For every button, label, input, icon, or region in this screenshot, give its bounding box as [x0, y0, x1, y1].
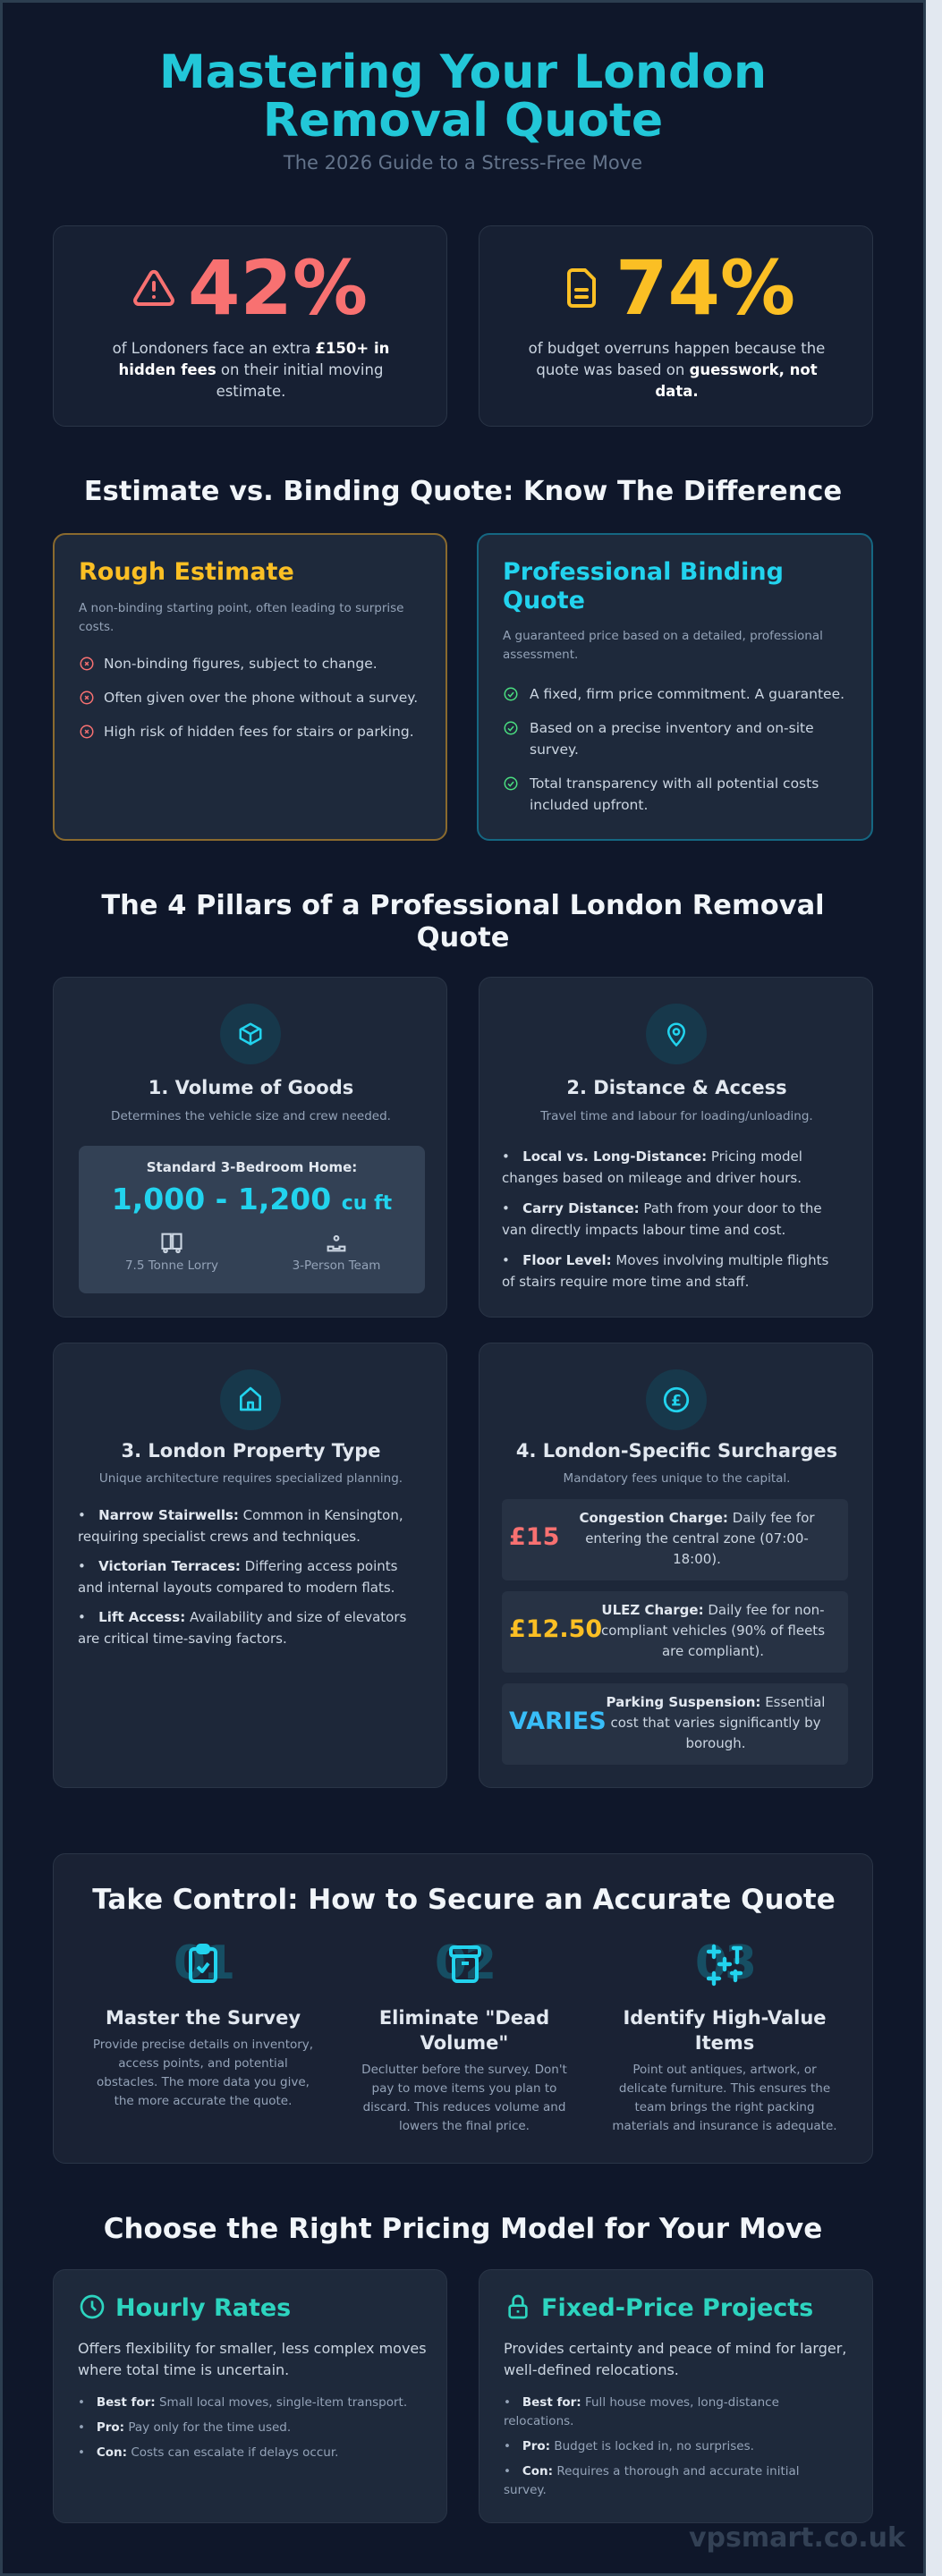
- list: [78, 2395, 407, 2460]
- description: A guaranteed price based on a detailed, professional assessment.: [503, 629, 823, 662]
- panel: rough estimate: [53, 533, 447, 841]
- icon: lorry: 7.5 Tonne Lorry: [125, 1258, 218, 1273]
- title: Mastering Your London: [159, 46, 767, 99]
- title: 2. Distance & Access: [566, 1077, 787, 1098]
- list: • Con: Requires a thorough and accurate initial survey.: [504, 2464, 800, 2497]
- fee: ULEZ: ULEZ Charge: Daily fee for non-compliant vehicles (90% of fleets are compliant).: [601, 1602, 825, 1659]
- list: Non-binding figures, subject to change.: [104, 656, 378, 672]
- subtitle: Determines the vehicle size and crew needed.: [111, 1109, 391, 1123]
- step 3: Identify High-Value: [623, 2007, 827, 2029]
- heading: Rough Estimate: [79, 558, 294, 586]
- list: • Lift Access: Availability and size of elevators are critical time-saving factors.: [78, 1609, 406, 1647]
- heading: 4 pillars: [101, 890, 825, 953]
- icon: pound coin: [646, 1369, 707, 1430]
- heading: estimate vs binding: Estimate vs. Binding Quote: Know The Difference: [84, 476, 842, 507]
- list: [78, 1507, 406, 1647]
- list: • Best for: Small local moves, single-item transport.: [78, 2395, 407, 2410]
- list: • Con: Costs can escalate if delays occur.: [78, 2445, 338, 2460]
- stat text: of Londoners face an extra £150+ in hidden fees on their initial moving estimate.: [113, 340, 389, 400]
- title: 1. Volume of Goods: [149, 1077, 353, 1098]
- panel: professional binding quote: [477, 533, 873, 841]
- subtitle: The 2026 Guide to a Stress-Free Move: [284, 152, 642, 174]
- fee: parking: VARIES: [509, 1707, 607, 1735]
- callout: 3-bedroom: [79, 1146, 425, 1293]
- step 1: Provide precise details on inventory, access points, and potential obstacles. The more data you give, the more accurate the quote.: [93, 2038, 313, 2108]
- fee: ULEZ: £12.50: [509, 1615, 602, 1643]
- panel: property type: [53, 1343, 447, 1788]
- step 2: Volume": [420, 2032, 508, 2054]
- panel: distance & access: [479, 977, 873, 1318]
- list: High risk of hidden fees for stairs or parking.: [104, 724, 414, 740]
- title: [159, 46, 767, 148]
- subtitle: Unique architecture requires specialized planning.: [99, 1471, 403, 1486]
- title: 4. London-Specific Surcharges: [516, 1440, 837, 1462]
- list: A fixed, firm price commitment. A guarantee.: [530, 686, 844, 702]
- step 2: Declutter before the survey. Don't pay to move items you plan to discard. This reduces volume and lowers the final price.: [361, 2063, 567, 2133]
- stat card: 74%: [479, 225, 873, 427]
- fee: congestion: £15: [509, 1523, 559, 1551]
- heading with clock icon: Hourly Rates: [115, 2294, 291, 2322]
- fee: congestion: [502, 1499, 848, 1580]
- list: • Pro: Pay only for the time used.: [78, 2420, 291, 2435]
- subtitle: Travel time and labour for loading/unloading.: [540, 1109, 813, 1123]
- list: Often given over the phone without a survey.: [104, 690, 418, 706]
- heading: Professional Binding Quote: [503, 558, 784, 614]
- icon: box: [220, 1004, 281, 1064]
- list: [81, 656, 418, 740]
- description: A non-binding starting point, often leading to surprise costs.: [79, 601, 404, 634]
- icon: clipboard with number: 01: [174, 1936, 233, 1990]
- panel: fixed-price projects: [479, 2269, 873, 2523]
- stat number: 74%: [615, 244, 795, 332]
- list: • Victorian Terraces: Differing access points and internal layouts compared to modern flats.: [78, 1558, 397, 1596]
- icon: pound coin: £: [671, 1392, 682, 1410]
- step 3: [612, 1936, 837, 2133]
- heading: pricing model: Choose the Right Pricing Model for Your Move: [104, 2213, 822, 2245]
- heading with lock icon: Fixed-Price Projects: [541, 2294, 813, 2322]
- step 2: [361, 1936, 567, 2133]
- list: • Local vs. Long-Distance: Pricing model changes based on mileage and driver hours.: [502, 1148, 802, 1186]
- icon: warning triangle: [133, 270, 174, 306]
- step 3: Point out antiques, artwork, or delicate furniture. This ensures the team brings the right packing materials and insurance is adequate.: [612, 2063, 837, 2133]
- panel: take control: [53, 1853, 873, 2164]
- icon: house: [220, 1369, 281, 1430]
- panel: hourly rates: [53, 2269, 447, 2523]
- description: Offers flexibility for smaller, less complex moves where total time is uncertain.: [78, 2340, 427, 2378]
- heading: 4 pillars: The 4 Pillars of a Professional London Removal: [101, 890, 825, 921]
- step 1: [93, 1936, 313, 2108]
- callout: 3-bedroom: Standard 3-Bedroom Home:: [147, 1159, 357, 1175]
- fee: ULEZ: [502, 1591, 848, 1673]
- description: Provides certainty and peace of mind for larger, well-defined relocations.: [504, 2340, 846, 2378]
- fee: parking: Parking Suspension: Essential cost that varies significantly by borough.: [607, 1694, 825, 1751]
- subtitle: Mandatory fees unique to the capital.: [564, 1471, 790, 1486]
- list: • Narrow Stairwells: Common in Kensington, requiring specialist crews and techniques.: [78, 1507, 403, 1545]
- list: [505, 686, 844, 813]
- stat text: of budget overruns happen because the quote was based on guesswork, not data.: [529, 340, 825, 400]
- list: [504, 2395, 800, 2497]
- panel: surcharges: [479, 1343, 873, 1788]
- icon: team: [293, 1235, 380, 1273]
- icon: document: [567, 268, 596, 308]
- icon: sparkles with number: 03: [695, 1936, 754, 1990]
- icon: lorry: [125, 1233, 218, 1273]
- heading: 4 pillars: Quote: [417, 922, 509, 953]
- icon: location pin: [646, 1004, 707, 1064]
- title: Removal Quote: [263, 94, 663, 148]
- list: Total transparency with all potential costs included upfront.: [530, 775, 819, 813]
- stat number: 42%: [188, 244, 368, 332]
- fee: parking: [502, 1683, 848, 1765]
- title: 3. London Property Type: [121, 1440, 381, 1462]
- list: • Floor Level: Moves involving multiple flights of stairs require more time and staff.: [502, 1252, 828, 1290]
- step 2: Eliminate "Dead: [379, 2007, 549, 2029]
- list: • Pro: Budget is locked in, no surprises.: [504, 2439, 754, 2453]
- stat card: 42%: [53, 225, 447, 427]
- callout: 3-bedroom: 1,000 - 1,200 cu ft: [112, 1182, 392, 1216]
- list: • Best for: Full house moves, long-distance relocations.: [504, 2395, 779, 2428]
- heading: Take Control: How to Secure an Accurate Quote: [92, 1884, 836, 1916]
- list: • Carry Distance: Path from your door to the van directly impacts labour time and cost.: [502, 1200, 822, 1238]
- watermark: vpsmart.co.uk: [689, 2522, 905, 2554]
- list: [502, 1148, 828, 1290]
- icon: archive box with number: 02: [435, 1936, 494, 1990]
- icon: team: 3-Person Team: [293, 1258, 380, 1273]
- fee: congestion: Congestion Charge: Daily fee for entering the central zone (07:00-18:00).: [579, 1510, 815, 1567]
- list: Based on a precise inventory and on-site survey.: [530, 720, 814, 758]
- step 3: Items: [695, 2032, 754, 2054]
- step 1: Master the Survey: [106, 2007, 301, 2029]
- panel: volume of goods: [53, 977, 447, 1318]
